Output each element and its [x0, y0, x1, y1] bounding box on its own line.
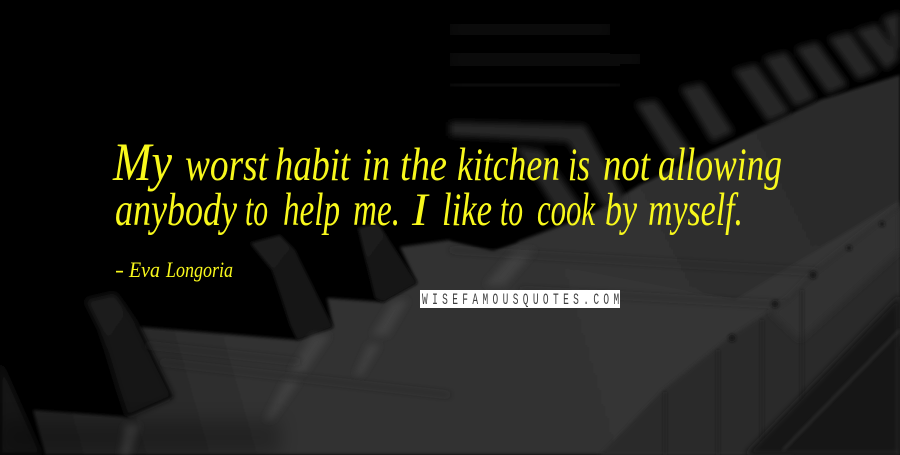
black key 1 side face: [85, 293, 173, 417]
quote line 1: kitchen: [457, 139, 560, 191]
quote line 1: My: [112, 132, 172, 192]
far end of the white keys: [654, 77, 898, 246]
white keys reflections: [120, 250, 535, 455]
quote line 1: allowing: [658, 139, 782, 191]
background streaks in the dark upper area: [450, 24, 640, 86]
attribution: -: [115, 257, 124, 282]
corner vignette: [43, 423, 276, 453]
quote line 2: help: [283, 184, 340, 236]
black key 2 side face: [250, 235, 333, 340]
quote line 2: cook: [537, 184, 596, 236]
attribution: Eva: [128, 257, 160, 282]
quote line 1: is: [568, 139, 590, 191]
quote line 2: like: [442, 184, 492, 236]
white keys gaps: [145, 250, 820, 395]
quote line 2: myself.: [648, 184, 743, 236]
leftmost black key side face: [0, 360, 40, 455]
quote line 1: the: [400, 139, 447, 191]
white keys front faces: [614, 257, 897, 452]
quote line 1: worst: [185, 139, 269, 191]
key separators: [665, 290, 802, 455]
fallboard highlight: [783, 330, 900, 450]
black key 4 front: [450, 239, 517, 250]
quote line 2: anybody: [115, 184, 237, 236]
quote line 1: habit: [275, 139, 351, 191]
quote line 2: to: [245, 184, 268, 236]
attribution: Longoria: [165, 257, 233, 282]
quote line 1: [112, 132, 782, 192]
quote line 2: I: [411, 184, 430, 236]
piano fallboard: [745, 295, 900, 455]
quote line 2: me.: [353, 184, 400, 236]
black key 3 side face: [358, 223, 417, 302]
attribution: [115, 257, 233, 282]
quote text: [112, 132, 782, 236]
quote line 1: not: [603, 139, 651, 191]
quote line 2: to: [500, 184, 523, 236]
quote line 2: [115, 184, 743, 236]
white keys front lighter lip: [779, 216, 895, 332]
quote line 1: in: [362, 139, 390, 191]
distant black key bands: [450, 12, 900, 216]
source badge: WISEFAMOUSQUOTES.COM: [422, 291, 619, 309]
quote line 2: by: [605, 184, 637, 236]
key corner marks: [728, 222, 884, 342]
